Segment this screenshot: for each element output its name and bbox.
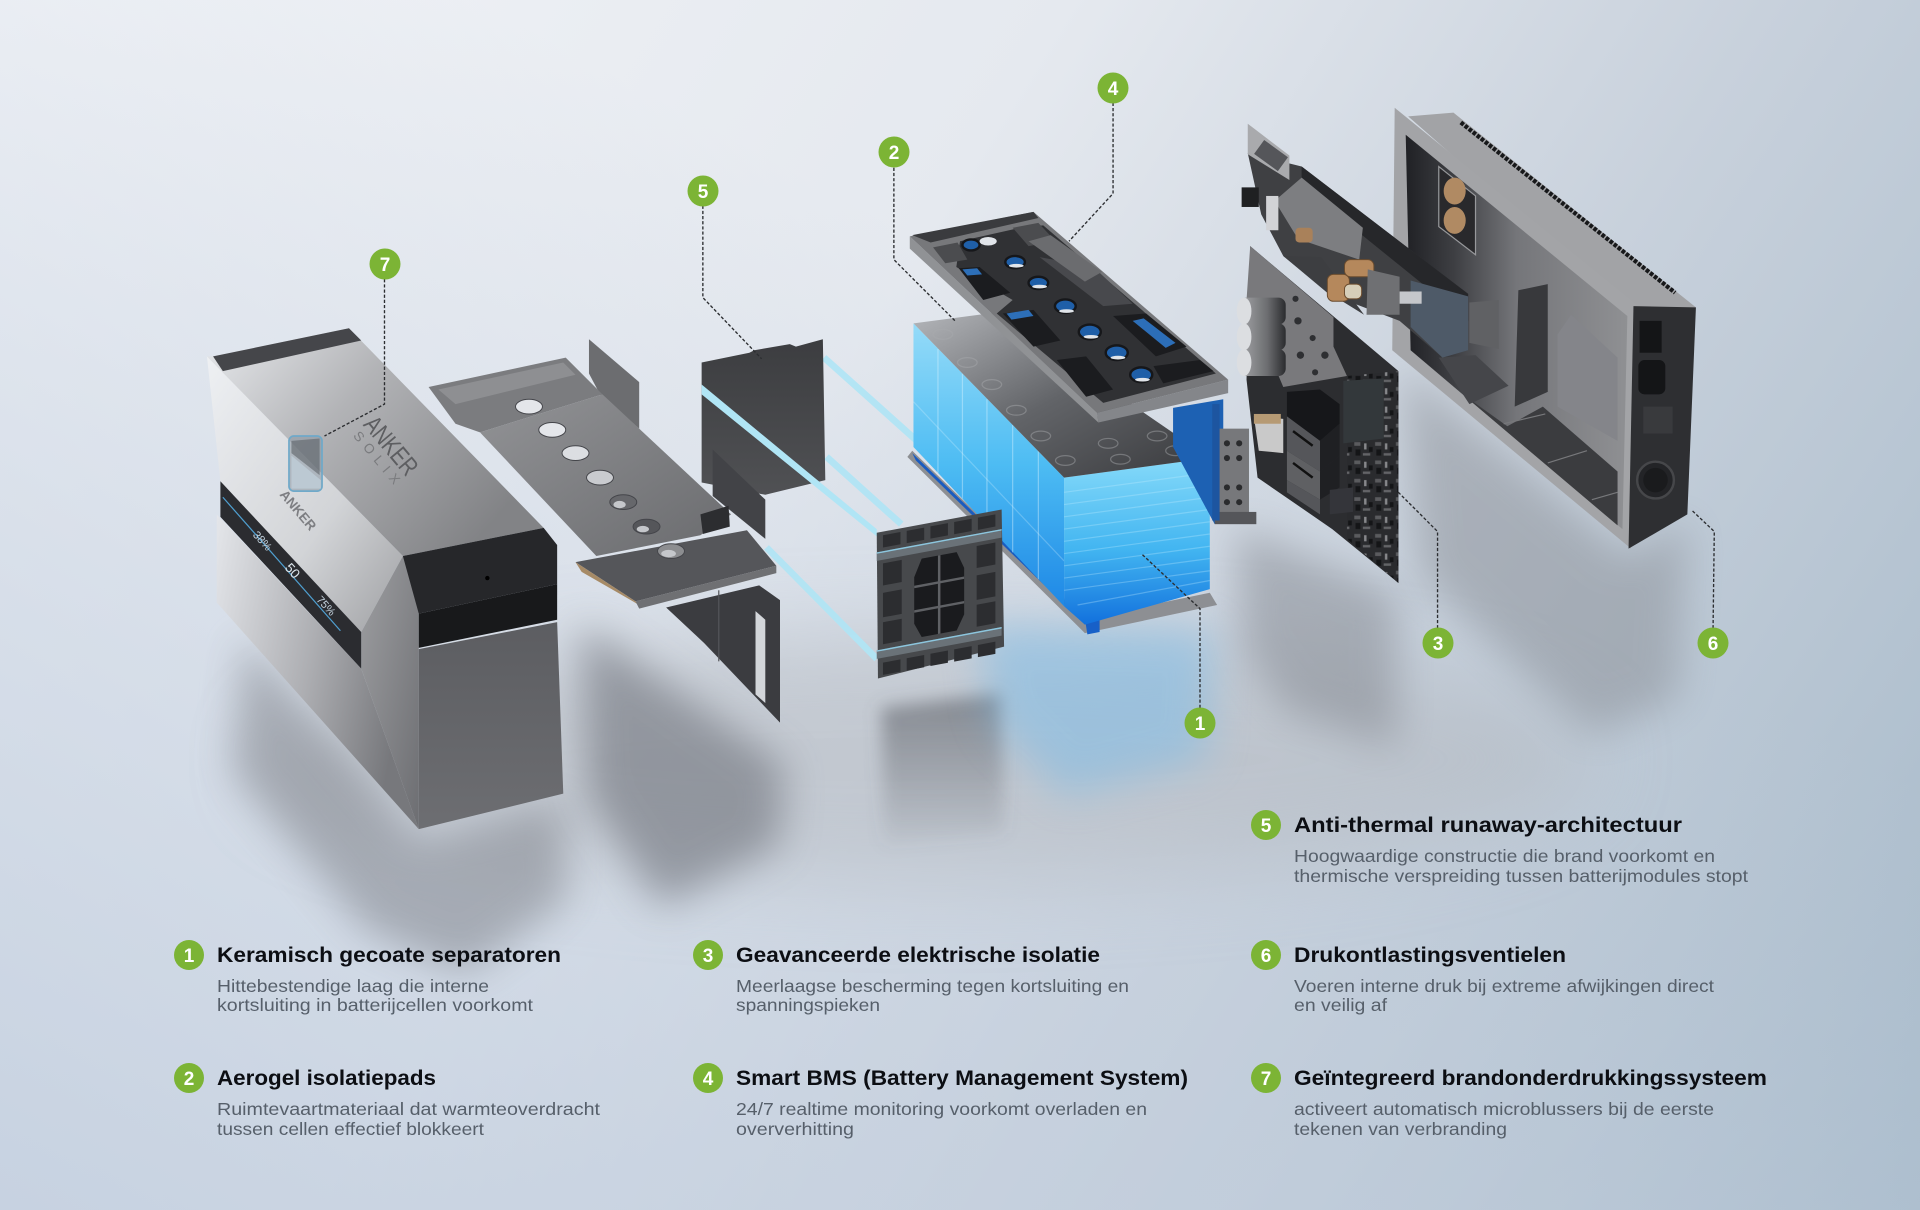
badge 4: 4	[1108, 79, 1119, 100]
panel: battery pack	[907, 312, 1256, 634]
badge 1	[1184, 708, 1216, 738]
badge 3	[1422, 628, 1454, 658]
legend item 4: Smart BMS (Battery Management System)	[736, 1067, 1188, 1090]
legend item 6: en veilig af	[1294, 995, 1387, 1015]
legend item 7: activeert automatisch microblussers bij de eerste	[1294, 1099, 1714, 1119]
icon: micro extinguisher	[277, 436, 322, 534]
legend item 5: 5	[1261, 816, 1272, 837]
aerogel top	[913, 312, 1210, 478]
BMS lenses	[962, 239, 1152, 382]
legend item 3: spanningspieken	[736, 995, 880, 1015]
badge 3: 3	[1433, 634, 1443, 655]
display panel: 38%	[250, 529, 274, 554]
legend item 6: Voeren interne druk bij extreme afwijkingen direct	[1294, 976, 1714, 996]
legend item 2: Aerogel isolatiepads	[217, 1067, 436, 1090]
legend item 1	[174, 940, 561, 1015]
brand mark: ANKER	[358, 411, 423, 481]
badge 2: 2	[889, 143, 899, 164]
legend item 6: 6	[1261, 946, 1271, 967]
legend item 4	[693, 1063, 1188, 1139]
blue side cells	[913, 323, 1064, 606]
legend item 4: 24/7 realtime monitoring voorkomt overladen en	[736, 1099, 1147, 1119]
panel: PCB board lower with capacitors	[1237, 246, 1398, 583]
badge 2	[878, 136, 910, 168]
legend item 6	[1251, 940, 1714, 1015]
capacitors	[1237, 298, 1286, 376]
legend item 4: oververhitting	[736, 1119, 854, 1139]
legend item 2: Ruimtevaartmateriaal dat warmteoverdracht	[217, 1099, 600, 1119]
badge 5: 5	[698, 182, 709, 203]
badge 1: 1	[1195, 714, 1206, 735]
panel: fire shield plate	[429, 339, 780, 723]
transformer	[1439, 167, 1476, 255]
legend item 5: Hoogwaardige constructie die brand voorkomt en	[1294, 846, 1715, 866]
leader lines	[324, 103, 1714, 708]
legend item 2: tussen cellen effectief blokkeert	[217, 1119, 484, 1139]
legend item 2	[174, 1063, 600, 1139]
legend item 3: Meerlaagse bescherming tegen kortsluiting en	[736, 976, 1129, 996]
legend item 4: 4	[703, 1069, 714, 1090]
legend item 2: 2	[184, 1069, 194, 1090]
copper coils	[1327, 260, 1374, 301]
legend item 7	[1251, 1063, 1767, 1139]
badge 5	[688, 176, 718, 206]
legend item 3: 3	[703, 946, 713, 967]
BMS interior	[956, 225, 1216, 403]
circuit noise	[1347, 371, 1398, 583]
small transformer	[1254, 414, 1283, 453]
floor reflections	[233, 367, 1687, 974]
connector block	[1212, 404, 1256, 524]
plate holes	[516, 399, 684, 558]
legend item 3	[693, 940, 1129, 1015]
legend item 1: Hittebestendige laag die interne	[217, 976, 489, 996]
badge 7	[370, 248, 400, 280]
legend item 1: Keramisch gecoate separatoren	[217, 944, 561, 967]
icon: micro extinguisher: ANKER	[277, 487, 319, 534]
badge 4	[1098, 72, 1128, 104]
panel: end plate	[877, 509, 1004, 678]
legend item 7: tekenen van verbranding	[1294, 1119, 1507, 1139]
panel: outer enclosure with fire suppression	[207, 328, 563, 829]
panel: anti-thermal pad	[702, 339, 877, 536]
base tray	[907, 451, 1217, 633]
illustration: exploded battery unit	[207, 103, 1714, 974]
display panel	[220, 481, 361, 669]
legend item 1: kortsluiting in batterijcellen voorkomt	[217, 995, 533, 1015]
callout badges on the diagram	[370, 72, 1728, 738]
badge 7: 7	[380, 255, 390, 276]
front cell stack	[1064, 458, 1210, 625]
badge 6	[1698, 628, 1728, 658]
beams: cyan links between pad and end plate	[767, 358, 989, 659]
brand mark: SOLIX	[350, 428, 407, 492]
legend item 5: Anti-thermal runaway-architectuur	[1294, 814, 1682, 837]
relays	[1287, 389, 1353, 514]
panel: enclosure rear housing	[1392, 108, 1696, 549]
legend item 6: Drukontlastingsventielen	[1294, 944, 1566, 967]
legend item 5	[1251, 810, 1748, 886]
housing floor	[1411, 350, 1618, 525]
display panel: 75%	[314, 594, 337, 619]
panel: smart BMS board	[910, 212, 1228, 423]
panel: PCB power board upper	[1242, 124, 1468, 358]
housing interior	[1406, 135, 1627, 529]
rear blue cold plate	[1173, 399, 1223, 524]
display panel: 50	[282, 560, 303, 581]
legend item 1: 1	[184, 946, 195, 967]
end face with pressure vent	[1629, 306, 1696, 549]
legend item 5: thermische verspreiding tussen batterijmodules stopt	[1294, 866, 1748, 886]
legend item 3: Geavanceerde elektrische isolatie	[736, 944, 1100, 967]
legend item 7: Geïntegreerd brandonderdrukkingssysteem	[1294, 1067, 1767, 1090]
legend item 7: 7	[1261, 1069, 1271, 1090]
badge 6: 6	[1708, 634, 1718, 655]
